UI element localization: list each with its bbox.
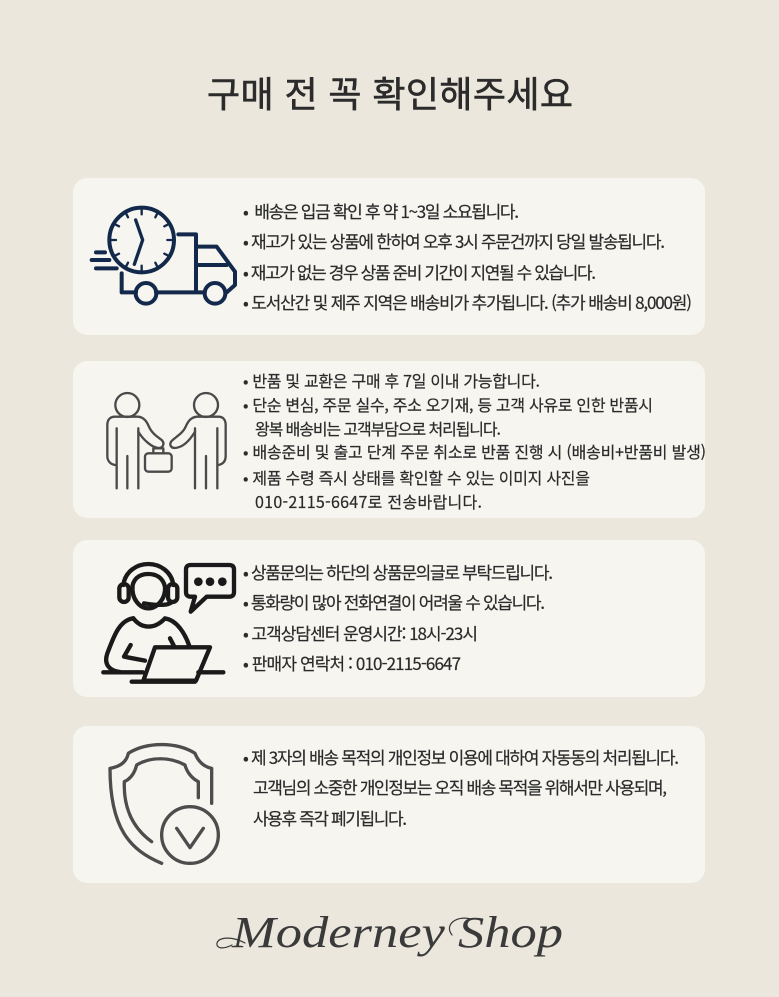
text block: privacy notes: 고객님의 소중한 개인정보는 오직 배송 목적을 위해서만 사용되며, bbox=[253, 774, 667, 799]
panel: privacy bbox=[73, 726, 705, 883]
text block: return policy: 왕복 배송비는 고객부담으로 처리됩니다. bbox=[255, 416, 501, 440]
icon: headset agent with speech bubble and laptop bbox=[103, 564, 234, 682]
panel: returns and exchanges bbox=[73, 361, 706, 518]
text block: shipping notes bbox=[243, 198, 692, 314]
text block: return policy: • 단순 변심, 주문 실수, 주소 오기재, 등 고객 사유로 인한 반품시 bbox=[243, 392, 653, 416]
icon: delivery truck with clock bbox=[92, 208, 235, 304]
text block: privacy notes: • 제 3자의 배송 목적의 개인정보 이용에 대하여 자동동의 처리됩니다. bbox=[243, 744, 679, 769]
text block: return policy: • 반품 및 교환은 구매 후 7일 이내 가능합니다. bbox=[243, 368, 540, 392]
text block: shipping notes: • 도서산간 및 제주 지역은 배송비가 추가됩니다. (추가 배송비 8,000원) bbox=[243, 289, 692, 314]
text block: contact notes: • 상품문의는 하단의 상품문의글로 부탁드립니다. bbox=[243, 559, 553, 584]
panel: shipping bbox=[73, 178, 705, 335]
text block: return policy: 010-2115-6647로 전송바랍니다. bbox=[255, 489, 482, 513]
text block: contact notes: • 고객상담센터 운영시간: 18시-23시 bbox=[243, 620, 478, 645]
text block: return policy: • 제품 수령 즉시 상태를 확인할 수 있는 이미지 사진을 bbox=[243, 465, 590, 489]
icon: shield with check mark bbox=[110, 745, 218, 863]
icon: two people with briefcase bbox=[107, 393, 226, 488]
text block: contact notes: • 통화량이 많아 전화연결이 어려울 수 있습니다. bbox=[243, 589, 545, 614]
text block: contact notes: • 판매자 연락처 : 010-2115-6647 bbox=[243, 650, 461, 675]
text block: contact notes bbox=[243, 559, 553, 675]
text block: privacy notes bbox=[243, 744, 679, 830]
text block: shipping notes: • 배송은 입금 확인 후 약 1~3일 소요됩니다. bbox=[243, 198, 519, 223]
text block: return policy: • 배송준비 및 출고 단계 주문 취소로 반품 진행 시 (배송비+반품비 발생) bbox=[243, 439, 706, 463]
text block: shipping notes: • 재고가 있는 상품에 한하여 오후 3시 주문건까지 당일 발송됩니다. bbox=[243, 228, 665, 253]
panel: customer service bbox=[73, 540, 705, 697]
title: 구매 전 꼭 확인해주세요 bbox=[207, 66, 573, 118]
text block: privacy notes: 사용후 즉각 폐기됩니다. bbox=[253, 805, 407, 830]
text block: shipping notes: • 재고가 없는 경우 상품 준비 기간이 지연될 수 있습니다. bbox=[243, 259, 596, 284]
logo: Moderney Shop: Moderney Shop bbox=[231, 908, 563, 957]
text block: return policy bbox=[243, 368, 706, 513]
